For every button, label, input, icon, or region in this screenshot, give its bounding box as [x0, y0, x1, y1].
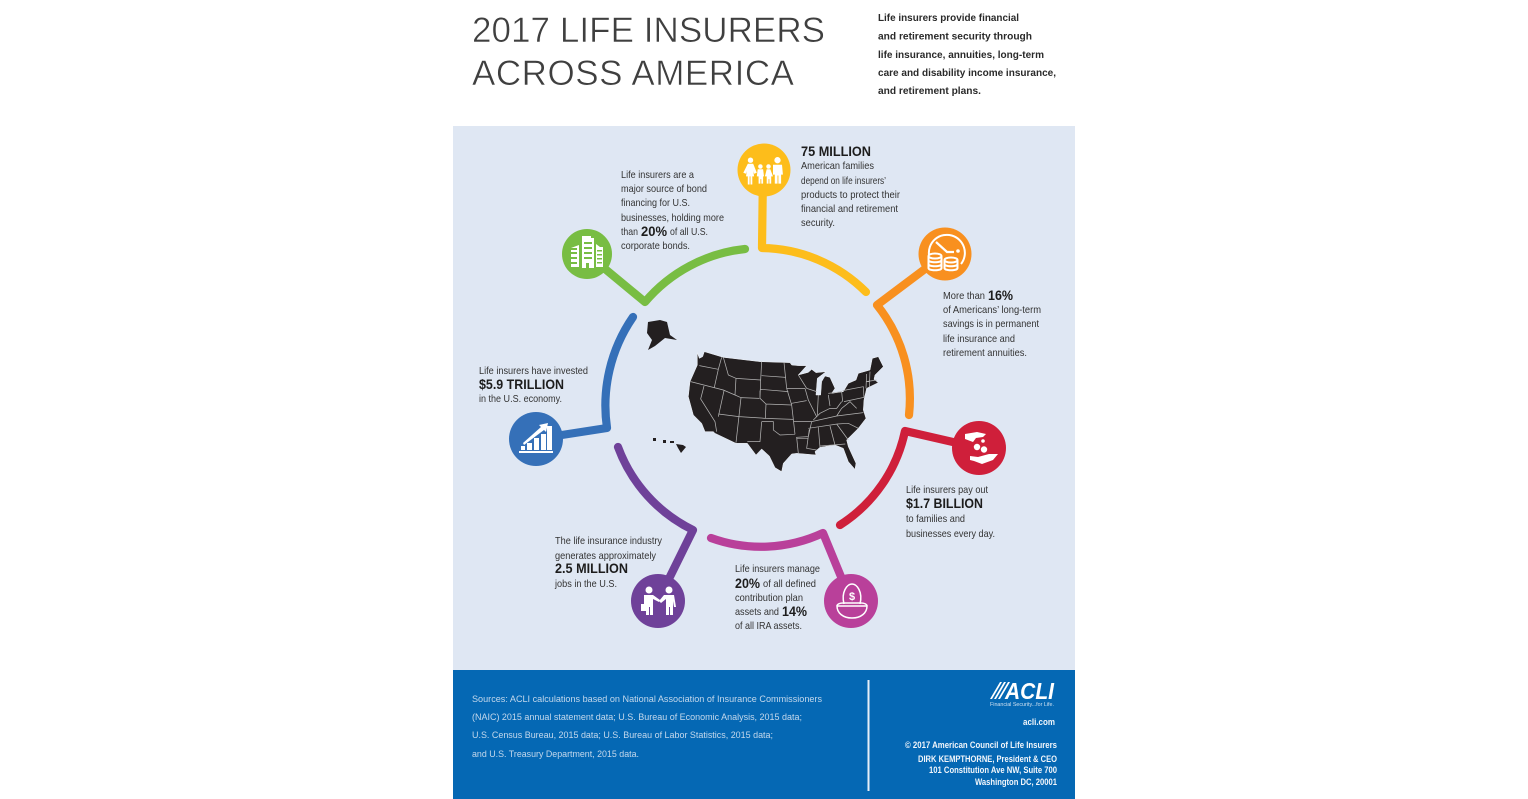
icon: handshake — [631, 574, 685, 628]
footer contact: 101 Constitution Ave NW, Suite 700 — [929, 765, 1057, 775]
ring segment: green — [587, 249, 745, 302]
text: 75 million families — [801, 143, 900, 229]
ring segment: blue — [536, 317, 633, 439]
text: investment: $5.9 TRILLION — [479, 376, 564, 392]
logo: ACLI — [990, 678, 1055, 708]
text: bond financing: Life insurers are a — [621, 169, 694, 181]
footer contact: acli.com — [1023, 717, 1055, 727]
intro text: and retirement plans. — [878, 85, 981, 97]
text: 75 million families: security. — [801, 217, 835, 229]
footer contact — [905, 717, 1057, 787]
title — [472, 11, 825, 93]
text: 75 million families: 75 MILLION — [801, 143, 871, 159]
panel: footer — [453, 670, 1075, 799]
text: plan assets: of all IRA assets. — [735, 620, 802, 632]
text: jobs: jobs in the U.S. — [554, 578, 617, 590]
footer sources: Sources: ACLI calculations based on National Association of Insurance Commissioners — [472, 694, 822, 705]
text: plan assets: Life insurers manage — [735, 563, 820, 575]
map: Hawaii — [653, 438, 686, 453]
icon: nest egg — [824, 574, 878, 628]
text: 75 million families: financial and retirement — [801, 203, 898, 215]
icon: office buildings — [562, 229, 612, 279]
icon: rising bar chart — [509, 412, 563, 466]
text: bond financing: financing for U.S. — [621, 197, 690, 209]
text: plan assets: of all defined — [763, 578, 816, 590]
ring segment: magenta — [711, 533, 851, 601]
text: 75 million families: depend on life insurers’ — [801, 175, 886, 187]
intro text: care and disability income insurance, — [878, 67, 1056, 79]
ring segment: purple — [618, 447, 693, 601]
text: long-term savings: More than — [943, 290, 985, 302]
ring segment: orange — [877, 254, 945, 415]
footer contact: DIRK KEMPTHORNE, President & CEO — [918, 754, 1057, 764]
intro text: Life insurers provide financial — [878, 12, 1019, 24]
icon: family — [738, 144, 790, 196]
title: ACROSS AMERICA — [472, 54, 795, 93]
icon: nest egg: $ — [849, 591, 855, 603]
intro text: life insurance, annuities, long-term — [878, 49, 1044, 61]
text: 75 million families: American families — [801, 160, 874, 172]
text: long-term savings: life insurance and — [943, 333, 1015, 345]
text: long-term savings: savings is in permanent — [943, 318, 1039, 330]
text: daily payouts — [906, 484, 995, 540]
footer contact: Washington DC, 20001 — [975, 777, 1057, 787]
text: investment — [479, 365, 588, 405]
text: jobs: The life insurance industry — [555, 535, 663, 547]
text: jobs — [554, 535, 663, 590]
map: Alaska — [647, 320, 677, 350]
text: jobs: 2.5 MILLION — [555, 560, 628, 576]
icon: clock and coins — [918, 228, 972, 280]
footer sources — [472, 694, 822, 760]
intro text: and retirement security through — [878, 30, 1032, 42]
text: daily payouts: to families and — [906, 513, 965, 525]
text: bond financing: 20% — [641, 223, 668, 239]
text: bond financing: corporate bonds. — [621, 240, 690, 252]
text: bond financing: major source of bond — [621, 183, 707, 195]
panel: main background — [453, 126, 1075, 670]
ring segment: red — [840, 431, 979, 525]
text: investment: in the U.S. economy. — [479, 393, 562, 405]
text: bond financing: than — [621, 226, 638, 238]
logo: ACLI: ACLI — [1004, 678, 1055, 704]
footer sources: (NAIC) 2015 annual statement data; U.S. Bureau of Economic Analysis, 2015 data; — [472, 712, 802, 723]
map: continental United States — [688, 352, 883, 472]
ring segment: family yellow — [762, 170, 866, 292]
footer sources: and U.S. Treasury Department, 2015 data. — [472, 749, 639, 760]
text: investment: Life insurers have invested — [479, 365, 588, 377]
text: daily payouts: $1.7 BILLION — [906, 495, 983, 511]
footer sources: U.S. Census Bureau, 2015 data; U.S. Bureau of Labor Statistics, 2015 data; — [472, 730, 773, 741]
text: bond financing: businesses, holding more — [621, 212, 724, 224]
text: daily payouts: Life insurers pay out — [906, 484, 988, 496]
text: bond financing — [621, 169, 724, 252]
text: long-term savings: of Americans’ long-term — [943, 304, 1041, 316]
icon: hands and coins — [952, 421, 1006, 475]
text: long-term savings: retirement annuities. — [943, 347, 1027, 359]
text: daily payouts: businesses every day. — [906, 528, 995, 540]
title: 2017 LIFE INSURERS — [472, 11, 825, 50]
text: jobs: generates approximately — [555, 550, 657, 562]
text: plan assets: 20% — [735, 575, 760, 591]
text: plan assets — [735, 563, 820, 632]
text: plan assets: assets and — [735, 606, 779, 618]
logo: ACLI: Financial Security...for Life. — [990, 702, 1054, 708]
text: plan assets: contribution plan — [735, 592, 803, 604]
text: long-term savings: 16% — [988, 287, 1013, 303]
text: plan assets: 14% — [782, 603, 807, 619]
intro text — [878, 12, 1056, 97]
footer contact: © 2017 American Council of Life Insurers — [905, 740, 1057, 750]
text: long-term savings — [943, 287, 1041, 359]
text: 75 million families: products to protect their — [801, 189, 900, 201]
text: bond financing: of all U.S. — [670, 226, 708, 238]
